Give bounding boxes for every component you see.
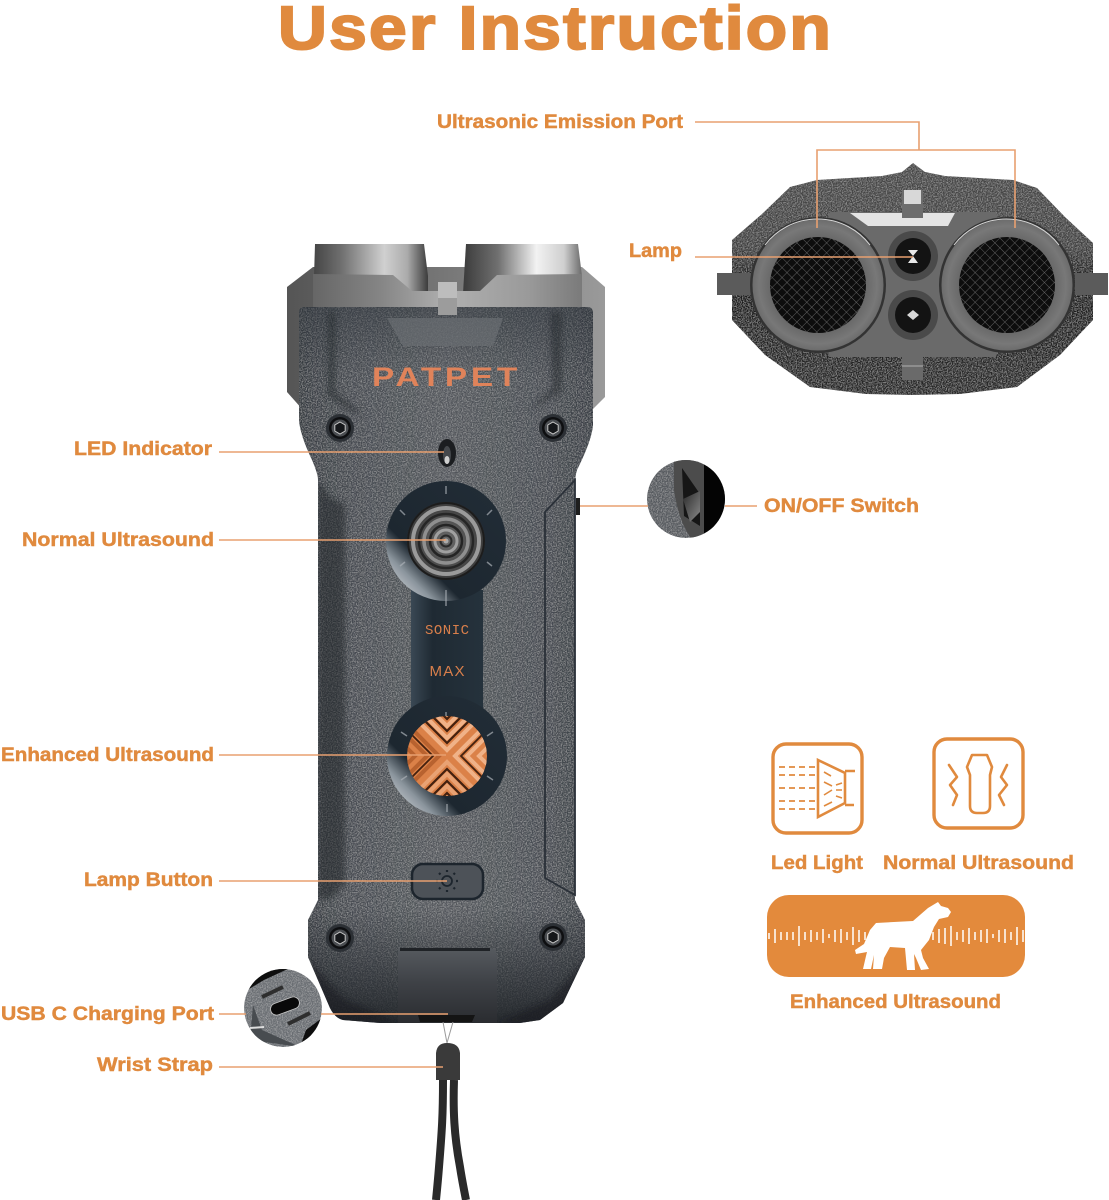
- label: enhanced ultrasound: Enhanced Ultrasound: [1, 745, 214, 766]
- left side tab: [717, 273, 751, 295]
- right side tab: [1075, 273, 1108, 295]
- brand logo: PATPET: [372, 362, 521, 392]
- lamp button: [412, 864, 483, 899]
- emission port bracket: [695, 122, 1015, 228]
- dog silhouette: [855, 902, 951, 970]
- callout lines: [219, 122, 1015, 1067]
- normal ultrasound button: [407, 502, 485, 580]
- bottom tab top edge: [400, 948, 490, 951]
- label: enhanced ultrasound legend: Enhanced Ultrasound: [790, 992, 1001, 1013]
- label: led light: Led Light: [771, 853, 864, 874]
- left cord: [436, 1080, 443, 1200]
- usb leader: [219, 1013, 448, 1015]
- strap cap: [436, 1043, 460, 1080]
- silver rear housing wings: [287, 267, 605, 410]
- label: lamp button: Lamp Button: [84, 870, 213, 891]
- side switch nub: [576, 498, 580, 515]
- LED indicator: [438, 439, 456, 467]
- led leader: [219, 451, 444, 453]
- bottom-right screw: [539, 923, 567, 951]
- icon: led light: [773, 744, 862, 833]
- label: usb c charging port: USB C Charging Port: [1, 1004, 215, 1025]
- left emitter: [750, 217, 886, 353]
- icon: enhanced ultrasound banner: [767, 895, 1025, 977]
- top-right screw: [539, 414, 567, 442]
- right cord: [454, 1080, 466, 1200]
- sonic label: SONIC: [425, 623, 469, 639]
- lower lamp: [888, 290, 938, 340]
- bottom tab: [398, 948, 497, 1023]
- thin loop threads: [443, 1022, 453, 1043]
- silver centre tab: [438, 282, 457, 315]
- enhanced leader: [219, 754, 446, 756]
- body shading: [299, 307, 593, 1023]
- strap anchor: [418, 1015, 475, 1022]
- tab highlight: [438, 282, 457, 298]
- label: normal ultrasound legend: Normal Ultrasound: [883, 853, 1074, 874]
- soft body shadows: [308, 312, 585, 1023]
- wrist strap: [418, 1015, 475, 1200]
- strap leader: [219, 1066, 443, 1068]
- usb port inset: [244, 968, 322, 1047]
- top housing: [732, 163, 1093, 395]
- switch leader: [580, 505, 757, 507]
- label: lamp: Lamp: [629, 241, 682, 262]
- top recessed bevel: [387, 318, 503, 346]
- lamp leader: [695, 256, 913, 258]
- label: ultrasonic emission port: Ultrasonic Emission Port: [437, 112, 684, 133]
- plate highlight: [850, 213, 955, 226]
- max label: MAX: [430, 663, 464, 680]
- right emitter: [939, 217, 1075, 353]
- on/off switch inset: [647, 460, 725, 538]
- sound wave bars: [769, 926, 1023, 946]
- label: led indicator: LED Indicator: [74, 439, 213, 460]
- lamp button leader: [219, 880, 447, 882]
- control band: [411, 590, 483, 720]
- device: main front view: [287, 244, 605, 1023]
- lamp: [888, 231, 938, 281]
- right emitter cylinder: [462, 244, 582, 310]
- enhanced bezel: [387, 696, 507, 816]
- top tab: [902, 190, 923, 218]
- enhanced ultrasound knob: [407, 716, 487, 796]
- normal leader: [219, 539, 446, 541]
- left emitter cylinder: [313, 244, 428, 310]
- label: normal ultrasound: Normal Ultrasound: [22, 530, 214, 551]
- centre plate: [806, 212, 1020, 357]
- silver shoulder: [313, 274, 582, 312]
- label: on/off switch: ON/OFF Switch: [764, 496, 919, 517]
- label: wrist strap: Wrist Strap: [97, 1055, 213, 1076]
- body shell: [299, 307, 593, 1023]
- device: top view: [717, 163, 1108, 395]
- icon: normal ultrasound: [934, 739, 1023, 828]
- bottom tab: [902, 350, 923, 380]
- bottom-left screw: [326, 924, 354, 952]
- tick marks: [400, 486, 493, 812]
- normal bezel: [386, 481, 506, 601]
- top-left screw: [326, 414, 354, 442]
- right side panel: [545, 480, 575, 895]
